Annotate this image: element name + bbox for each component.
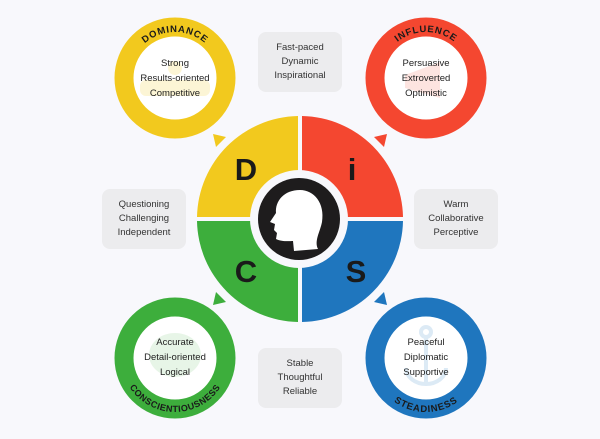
text: conscientiousness traits: Detail-oriented [144,352,206,363]
box: bottom: Reliable [283,386,317,397]
box: right: Perceptive [434,227,478,238]
text: influence traits [402,58,450,99]
ring: conscientiousness [114,298,236,418]
letters: C [235,254,257,289]
icon: faint megaphone [405,62,440,98]
label: influence: INFLUENCE [394,25,458,42]
text: conscientiousness traits: Logical [160,367,190,378]
text: dominance traits: Competitive [150,88,200,99]
icon: faint anchor [406,327,446,384]
text: influence traits: Persuasive [402,58,450,69]
box: left: Questioning [119,199,169,210]
text: steadiness traits [403,337,449,378]
label: dominance: DOMINANCE [141,26,208,43]
box: top: Inspirational [274,70,326,81]
text: steadiness traits: Supportive [403,367,449,378]
text: influence traits: Optimistic [405,88,447,99]
arrows [213,134,387,305]
ring: dominance [114,18,236,138]
box: left: Independent [118,227,170,238]
box: bottom: Thoughtful [278,372,322,383]
ring: steadiness [366,298,486,418]
box: right [414,189,498,249]
box: top: Dynamic [282,56,318,67]
box: bottom: Stable [287,358,313,369]
text: dominance traits [140,58,210,99]
box: left: Challenging [119,213,169,224]
disc wheel [197,116,403,322]
box: top [258,32,342,92]
box: right: Warm [444,199,468,210]
label: steadiness: STEADINESS [394,397,456,412]
text: dominance traits: Strong [161,58,189,69]
letters: S [346,254,366,289]
text: conscientiousness traits [144,337,206,378]
ring: influence [366,18,486,138]
label: conscientiousness: CONSCIENTIOUSNESS [130,384,220,412]
box: right: Collaborative [428,213,484,224]
text: influence traits: Extroverted [402,73,450,84]
text: steadiness traits: Diplomatic [404,352,448,363]
box: top: Fast-paced [276,42,324,53]
text: conscientiousness traits: Accurate [156,337,194,348]
icon: head [270,190,322,251]
box: left [102,189,186,249]
letters: D [235,152,257,187]
letters [235,152,366,289]
letters: i [348,152,356,187]
box: bottom [258,348,342,408]
icon: faint people [140,61,210,96]
text: steadiness traits: Peaceful [408,337,444,348]
icon: faint brain [149,333,201,377]
text: dominance traits: Results-oriented [140,73,210,84]
